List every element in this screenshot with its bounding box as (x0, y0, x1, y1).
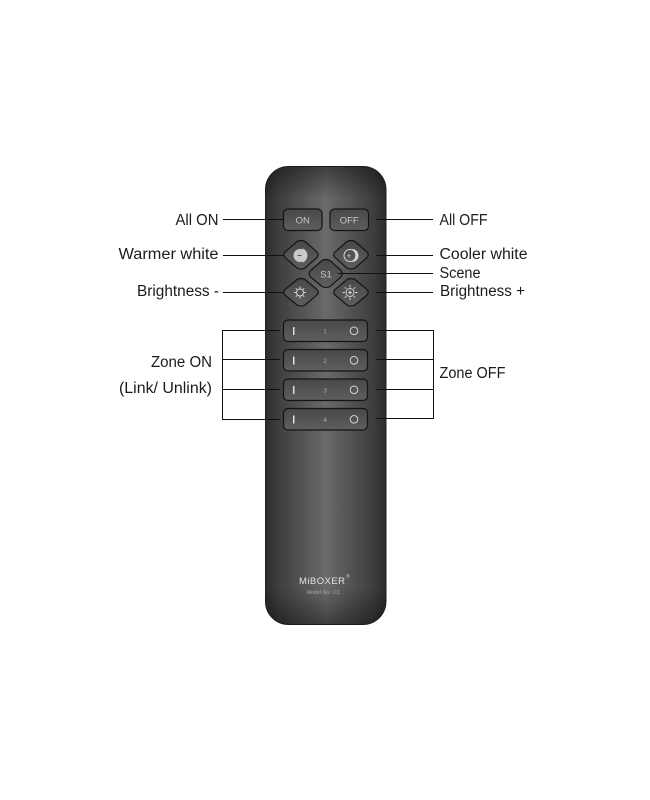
label: Zone OFF: Zone OFF (440, 365, 506, 382)
brand logo and model number: ® (346, 573, 350, 580)
label: Brightness +: Brightness + (440, 283, 525, 300)
label: Warmer white: Warmer white (118, 246, 218, 263)
label: Cooler white: Cooler white (440, 246, 528, 263)
label: All OFF: All OFF (440, 212, 488, 229)
button: brightness minus (284, 278, 318, 306)
button: brightness plus (334, 278, 368, 306)
label: Brightness -: Brightness - (137, 283, 219, 300)
button: cooler white: + (347, 252, 352, 260)
button: OFF: OFF (340, 216, 359, 226)
brand logo and model number: Model No.: C1 (307, 590, 340, 596)
zone ON bracket (222, 330, 280, 420)
button: S1 scene: S1 (320, 270, 332, 280)
brand logo and model number (299, 573, 350, 596)
button: warmer white (284, 240, 318, 269)
zone button 2: 2 (323, 358, 327, 365)
zone button 1: 1 (323, 328, 327, 336)
callout lines: top right (338, 220, 433, 292)
label: Zone ON: Zone ON (151, 354, 212, 371)
button: cooler white (334, 240, 368, 269)
zone button 3 (284, 379, 368, 400)
label: Link / Unlink: (Link/ Unlink) (119, 380, 212, 397)
remote control body (266, 166, 386, 624)
zone button 4: 4 (323, 417, 327, 424)
zone button 2 (284, 350, 368, 371)
button: OFF (330, 209, 368, 230)
zone button 1 (284, 320, 368, 342)
label: Scene: Scene (440, 265, 480, 282)
button: ON (284, 209, 322, 230)
zone button 4 (284, 408, 368, 430)
button: ON: ON (296, 216, 310, 226)
button: S1 scene (309, 260, 342, 288)
callout lines: top left (223, 220, 283, 292)
zone OFF bracket (376, 330, 434, 418)
label: All ON: All ON (176, 212, 218, 229)
brand logo and model number: MiBOXER (299, 576, 345, 587)
zone button 3: 3 (323, 388, 327, 394)
